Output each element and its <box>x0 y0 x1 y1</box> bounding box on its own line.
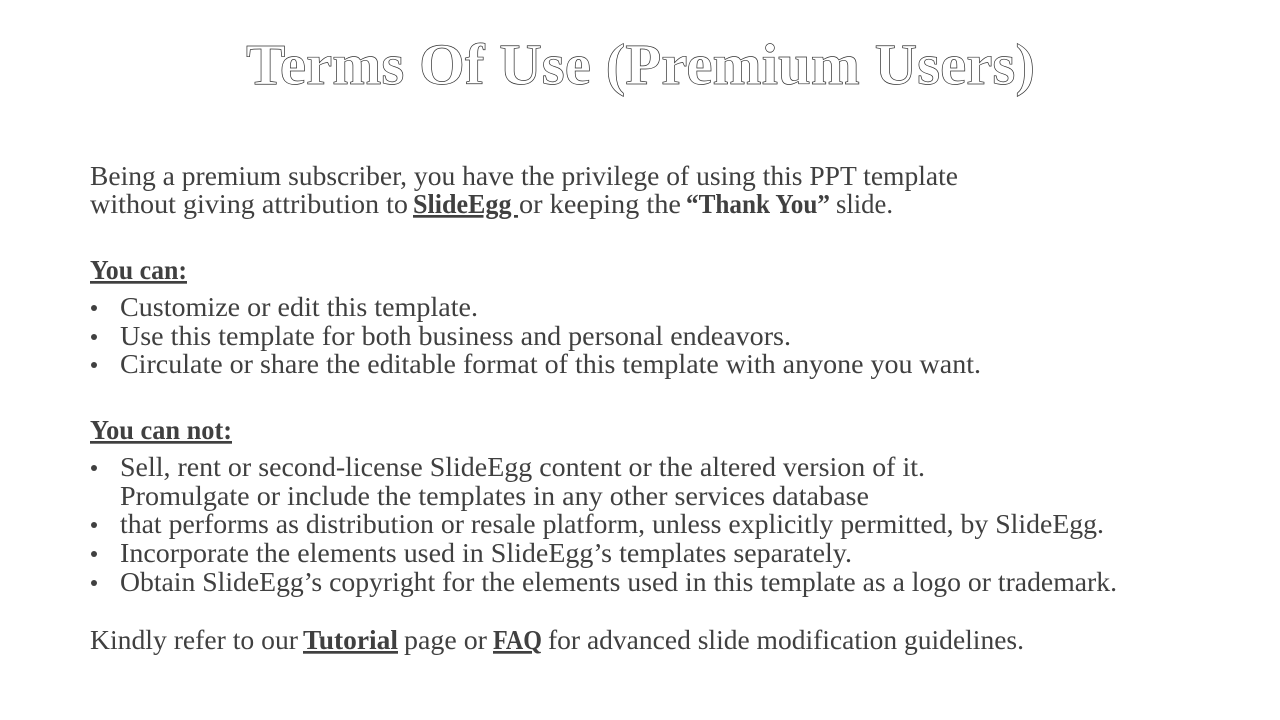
list: permitted uses: Circulate or share the editable format of this template with anyone you want. <box>120 349 981 379</box>
list: prohibited uses: Sell, rent or second-license SlideEgg content or the altered version of it. <box>120 452 925 482</box>
heading: you can: You can: <box>90 255 187 285</box>
text block: closing note: Kindly refer to our <box>90 625 298 655</box>
text block: introduction: without giving attribution to <box>90 189 408 219</box>
text block: closing note: for advanced slide modification guidelines. <box>548 625 1024 655</box>
list: prohibited uses: Incorporate the elements used in SlideEgg’s templates separately. <box>120 538 852 568</box>
text block: introduction: “Thank You” <box>686 189 830 219</box>
title: Terms Of Use (Premium Users) <box>246 32 1035 97</box>
list: permitted uses: Use this template for both business and personal endeavors. <box>120 321 791 351</box>
heading: you can not: You can not: <box>90 415 232 445</box>
text block: closing note: page or <box>404 625 487 655</box>
list: permitted uses: Customize or edit this template. <box>120 292 478 322</box>
text block: introduction: SlideEgg <box>413 189 518 219</box>
text block: introduction <box>90 161 958 219</box>
list: prohibited uses: Promulgate or include the templates in any other services database <box>120 481 869 511</box>
list: permitted uses <box>91 292 981 379</box>
text block: introduction: Being a premium subscriber, you have the privilege of using this PPT template <box>90 161 958 191</box>
text block: closing note: Tutorial <box>303 625 398 655</box>
text block: introduction: or keeping the <box>519 189 681 219</box>
text block: closing note: FAQ <box>493 625 542 655</box>
text block: closing note <box>90 625 1024 655</box>
text block: introduction: slide. <box>836 189 893 219</box>
list: prohibited uses: Obtain SlideEgg’s copyright for the elements used in this template as a logo or trademark. <box>120 567 1117 597</box>
list: prohibited uses: that performs as distribution or resale platform, unless explicitly permitted, by SlideEgg. <box>120 509 1104 539</box>
list: prohibited uses <box>91 452 1117 597</box>
